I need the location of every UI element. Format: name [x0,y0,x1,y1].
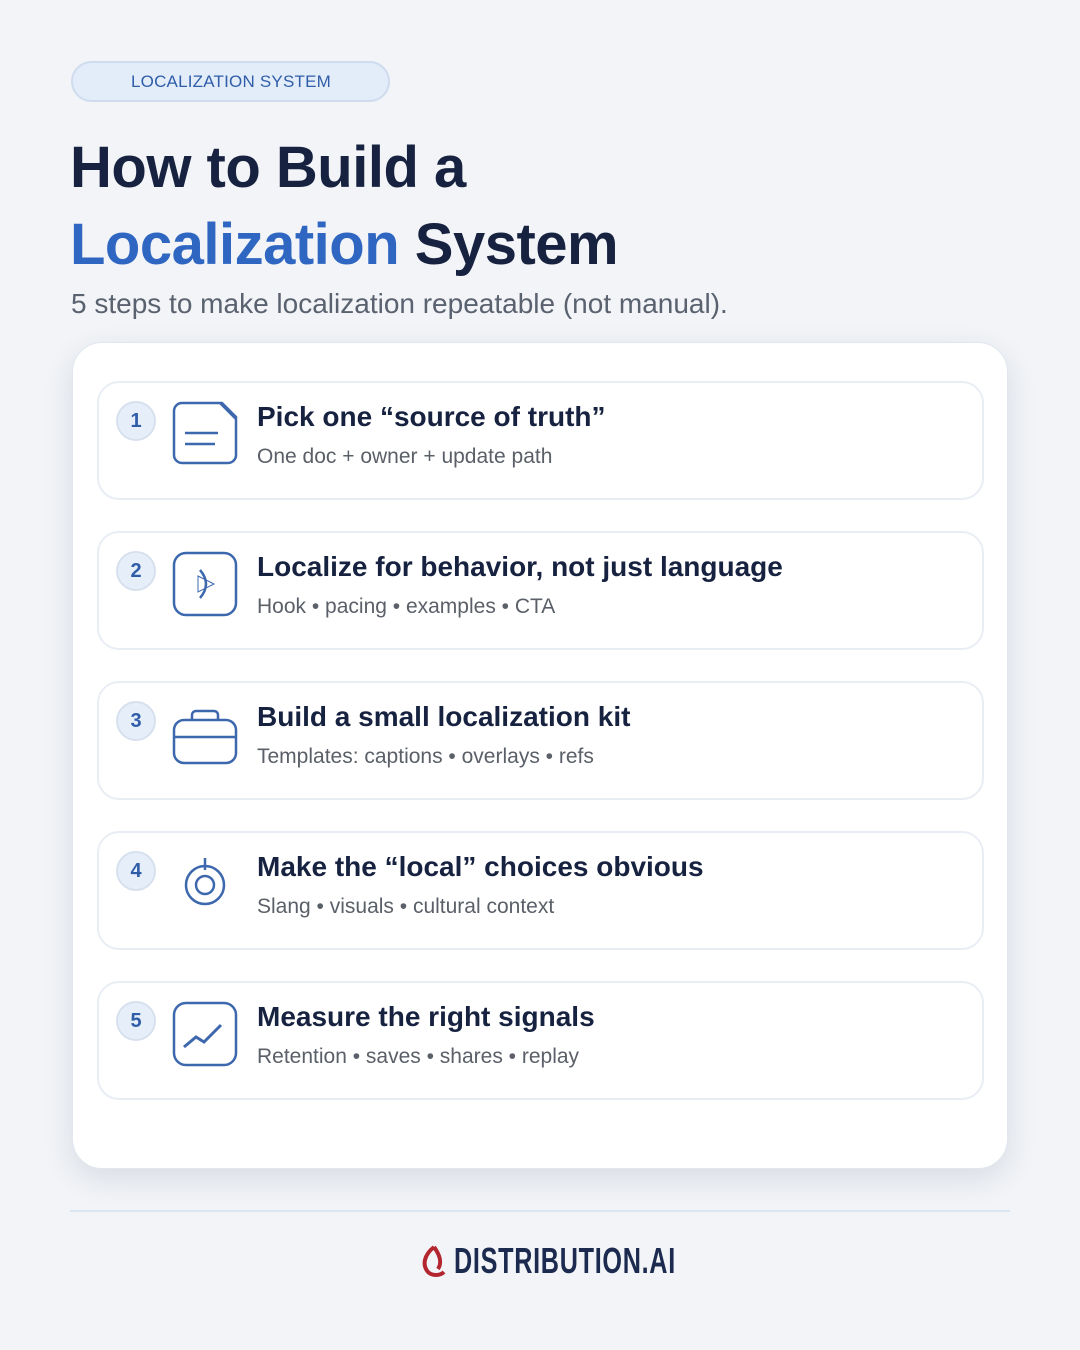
step 5: Retention • saves • shares • replay [257,1045,579,1068]
title [70,135,618,277]
step 4: 4 [130,860,142,882]
step 1: One doc + owner + update path [257,445,552,468]
step 2: Hook • pacing • examples • CTA [257,595,555,618]
step 4 [97,831,984,950]
step 3 [97,681,984,800]
step 1: Pick one “source of truth” [257,401,606,432]
step 5 [97,981,984,1100]
step 3: Templates: captions • overlays • refs [257,745,594,768]
icon: chart [172,1002,238,1066]
logo: DISTRIBUTION.AI [454,1240,676,1281]
step 3: 3 [130,710,142,732]
subtitle: 5 steps to make localization repeatable (not manual). [71,288,728,319]
pill label: LOCALIZATION SYSTEM [131,72,331,91]
step 5: 5 [130,1010,142,1032]
step 3: Build a small localization kit [257,701,630,732]
step 2: Localize for behavior, not just language [257,551,783,582]
icon: briefcase [172,710,238,764]
step 5: Measure the right signals [257,1001,595,1032]
step 4: Make the “local” choices obvious [257,851,704,882]
step 2: 2 [130,560,142,582]
title: Localization System [70,212,618,277]
step 2 [97,531,984,650]
pill label [71,61,390,102]
icon: target [184,858,226,906]
title: How to Build a [70,135,466,200]
icon: document [172,402,238,464]
icon: play [172,552,238,616]
panel: steps [72,342,1008,1169]
step 1 [97,381,984,500]
step 4: Slang • visuals • cultural context [257,895,554,918]
step 1: 1 [130,410,142,432]
